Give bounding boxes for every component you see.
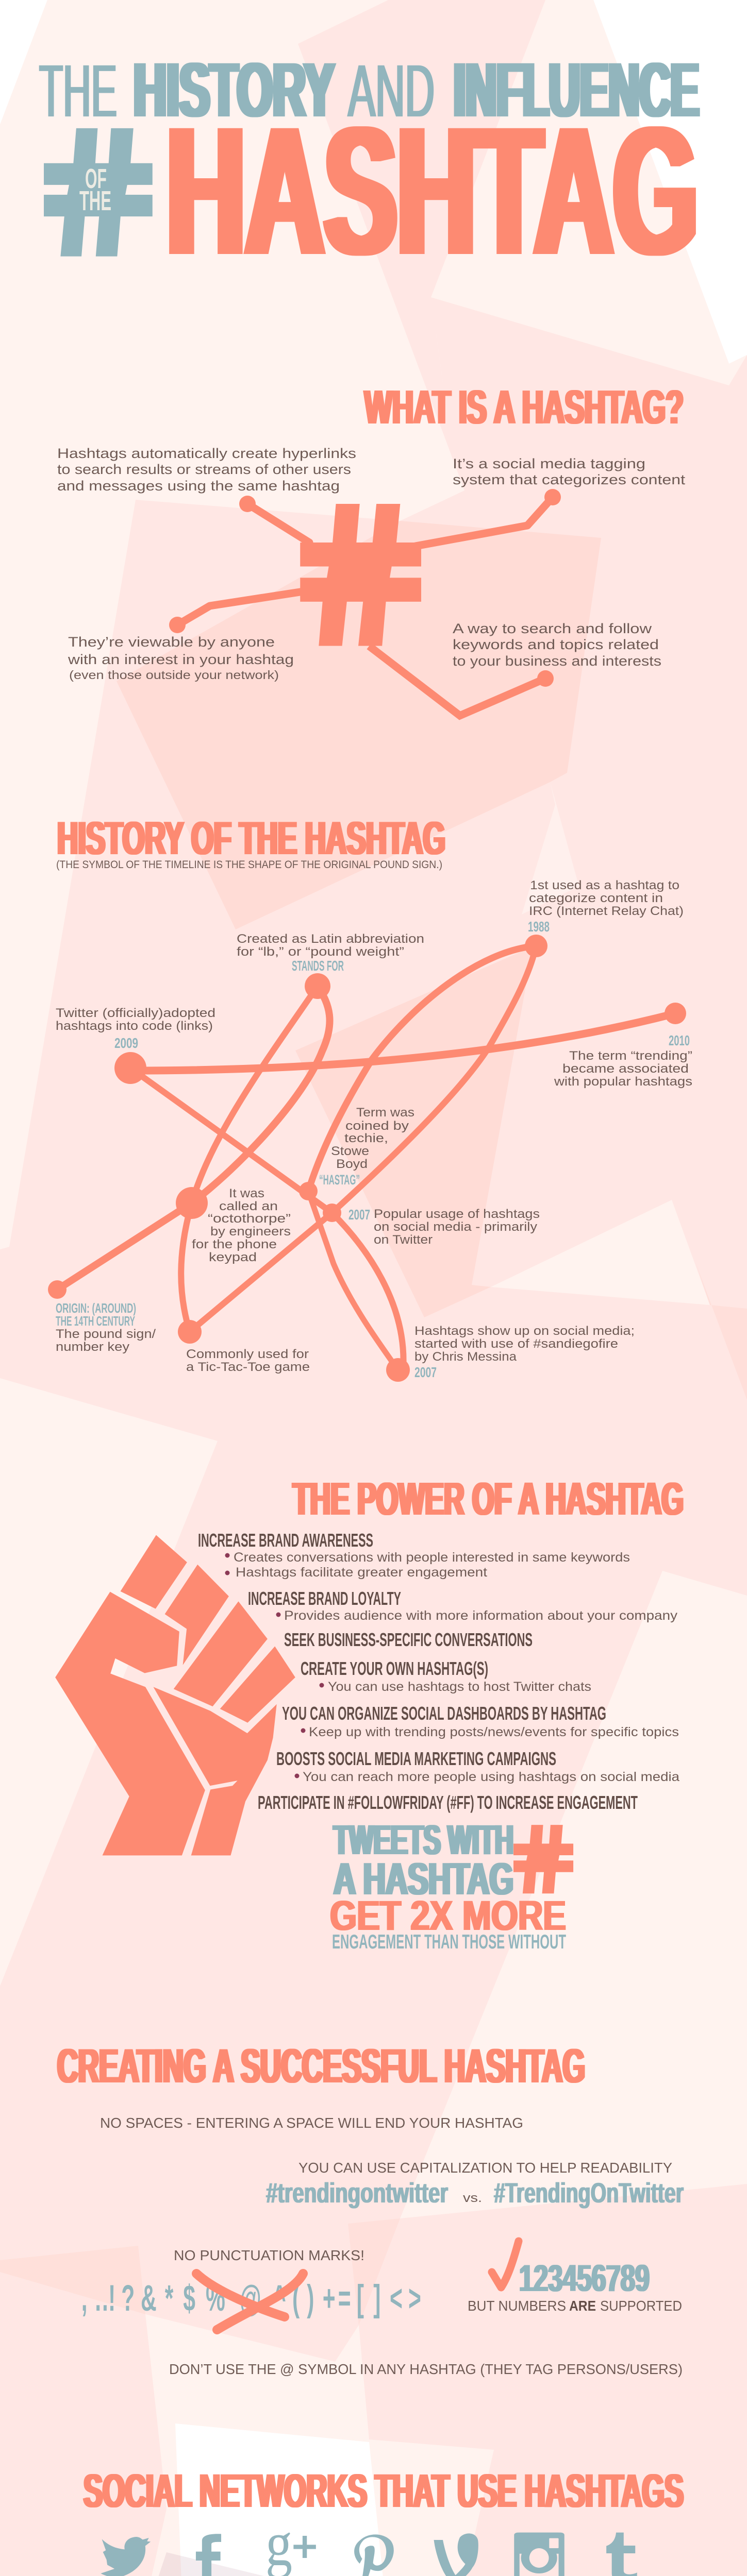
timeline event: term coined: “HASTAG” bbox=[319, 1172, 360, 1188]
text block: search and follow: A way to search and follow bbox=[453, 621, 652, 636]
icon: hash with connector legs bbox=[169, 489, 561, 716]
tip: no punctuation: NO PUNCTUATION MARKS! bbox=[174, 2247, 364, 2263]
benefit: campaigns: BOOSTS SOCIAL MEDIA MARKETING CAMPAIGNS bbox=[276, 1748, 556, 1769]
benefit: conversations: SEEK BUSINESS-SPECIFIC CONVERSATIONS bbox=[284, 1629, 533, 1650]
tip: numbers supported: BUT NUMBERS bbox=[468, 2298, 566, 2314]
tip: numbers supported bbox=[468, 2241, 682, 2314]
timeline event: origin: THE 14TH CENTURY bbox=[56, 1313, 135, 1329]
text block: search and follow: keywords and topics related bbox=[453, 637, 659, 652]
panel: the power of a hashtag bbox=[55, 1473, 684, 1953]
timeline event: trending 2010: The term “trending” bbox=[569, 1049, 692, 1063]
timeline event: IRC 1988 bbox=[528, 878, 684, 935]
benefit: brand awareness bbox=[198, 1530, 630, 1580]
text block: viewable by anyone: with an interest in your hashtag bbox=[68, 652, 294, 667]
timeline event: octothorpe: keypad bbox=[209, 1250, 257, 1264]
timeline event: chris messina 2007: started with use of #sandiegofire bbox=[414, 1337, 618, 1351]
timeline event: twitter 2009: Twitter (officially)adopted bbox=[56, 1006, 215, 1020]
timeline event: stands for: STANDS FOR bbox=[292, 958, 344, 974]
timeline event: trending 2010: became associated bbox=[562, 1062, 689, 1076]
timeline event: octothorpe: called an bbox=[219, 1199, 278, 1213]
timeline event: term coined: techie, bbox=[344, 1131, 388, 1145]
tip: no spaces: NO SPACES - ENTERING A SPACE WILL END YOUR HASHTAG bbox=[100, 2115, 523, 2131]
timeline event: origin: ORIGIN: (AROUND) bbox=[56, 1300, 136, 1316]
timeline event: tic-tac-toe: Commonly used for bbox=[186, 1347, 309, 1361]
list: benefits bbox=[198, 1530, 679, 1813]
timeline event: octothorpe: for the phone bbox=[192, 1238, 277, 1251]
text block: tagging system bbox=[453, 456, 686, 487]
timeline event: term coined: Term was bbox=[356, 1106, 414, 1120]
icon: coral hash bbox=[513, 1825, 573, 1893]
icon: large hash with of the: THE bbox=[79, 185, 111, 216]
timeline event: origin bbox=[56, 1300, 156, 1354]
benefit: campaigns bbox=[276, 1748, 679, 1784]
benefit: brand loyalty: INCREASE BRAND LOYALTY bbox=[248, 1588, 401, 1609]
timeline event: octothorpe: by engineers bbox=[210, 1225, 291, 1239]
benefit: own hashtags: You can use hashtags to host Twitter chats bbox=[328, 1680, 591, 1694]
timeline event: IRC 1988: IRC (Internet Relay Chat) bbox=[529, 904, 684, 918]
timeline event: term coined: coined by bbox=[345, 1119, 409, 1133]
timeline event: octothorpe bbox=[192, 1187, 291, 1264]
benefit: brand awareness: Hashtags facilitate greater engagement bbox=[236, 1565, 487, 1580]
tip: no punctuation bbox=[81, 2247, 421, 2330]
text block: search and follow bbox=[453, 621, 661, 669]
title line: the history and influence: THE bbox=[39, 49, 117, 132]
timeline event: stands for bbox=[237, 932, 424, 974]
timeline: pound sign shape bbox=[48, 935, 686, 1382]
timeline event: term coined: Stowe bbox=[331, 1144, 369, 1158]
timeline event: trending 2010: 2010 bbox=[669, 1032, 690, 1048]
text block: hyperlinks: to search results or streams of other users bbox=[57, 462, 351, 477]
benefit: brand awareness: Creates conversations with people interested in same keywords bbox=[234, 1550, 630, 1565]
panel: creating a successful hashtag bbox=[57, 2039, 684, 2377]
icon: check mark bbox=[492, 2241, 519, 2287]
text block: viewable by anyone: They’re viewable by anyone bbox=[68, 634, 275, 650]
heading: HISTORY OF THE HASHTAG bbox=[57, 812, 445, 865]
title bbox=[39, 46, 699, 293]
timeline event: chris messina 2007: by Chris Messina bbox=[414, 1350, 517, 1364]
text block: viewable by anyone: (even those outside your network) bbox=[69, 668, 279, 682]
benefit: brand awareness: INCREASE BRAND AWARENESS bbox=[198, 1530, 373, 1551]
benefit: campaigns: You can reach more people using hashtags on social media bbox=[303, 1770, 679, 1784]
timeline event: chris messina 2007: Hashtags show up on social media; bbox=[414, 1324, 635, 1338]
benefit: dashboards: Keep up with trending posts/news/events for specific topics bbox=[309, 1725, 679, 1739]
subtitle: (THE SYMBOL OF THE TIMELINE IS THE SHAPE OF THE ORIGINAL POUND SIGN.) bbox=[56, 859, 442, 871]
callout: tweets with a hashtag bbox=[330, 1817, 573, 1953]
icon: red cross bbox=[196, 2274, 303, 2330]
timeline event: twitter 2009 bbox=[56, 1006, 215, 1051]
timeline event: popular usage 2007 bbox=[348, 1207, 540, 1247]
callout: tweets with a hashtag: GET 2X MORE bbox=[330, 1892, 566, 1939]
text block: viewable by anyone bbox=[68, 634, 294, 682]
timeline event: popular usage 2007: on social media - primarily bbox=[374, 1220, 537, 1234]
timeline event: IRC 1988: 1988 bbox=[528, 919, 550, 935]
benefit: own hashtags bbox=[301, 1658, 591, 1694]
timeline event: IRC 1988: 1st used as a hashtag to bbox=[530, 878, 679, 892]
icon: raised fist bbox=[55, 1535, 295, 1855]
icon: large hash with of the: OF bbox=[85, 163, 107, 194]
panel: social networks bbox=[84, 2465, 684, 2576]
panel: history of the hashtag bbox=[48, 812, 692, 1382]
timeline event: twitter 2009: hashtags into code (links) bbox=[56, 1019, 213, 1033]
timeline nodes bbox=[48, 935, 686, 1382]
tip: numbers supported: 123456789 bbox=[519, 2258, 650, 2299]
benefit: brand loyalty bbox=[248, 1588, 678, 1623]
icons: social networks bbox=[101, 2509, 637, 2576]
timeline event: tic-tac-toe: a Tic-Tac-Toe game bbox=[186, 1360, 310, 1374]
timeline event: popular usage 2007: 2007 bbox=[348, 1207, 370, 1223]
tip: numbers supported: SUPPORTED bbox=[600, 2298, 682, 2314]
title line: the history and influence: HISTORY bbox=[134, 46, 335, 133]
tip: no punctuation: ,..!?&*$%@^()+=[]<> bbox=[81, 2278, 421, 2319]
text block: search and follow: to your business and interests bbox=[453, 653, 661, 669]
icon: instagram bbox=[514, 2533, 565, 2576]
timeline event: octothorpe: “octothorpe” bbox=[208, 1212, 291, 1226]
timeline event: term coined: Boyd bbox=[336, 1157, 368, 1171]
tip: capitalization: YOU CAN USE CAPITALIZATION TO HELP READABILITY bbox=[298, 2160, 672, 2176]
benefit: brand loyalty: Provides audience with more information about your company bbox=[284, 1608, 678, 1623]
benefit: dashboards bbox=[282, 1703, 679, 1739]
timeline event: stands for: for “lb,” or “pound weight” bbox=[237, 945, 404, 959]
tip: capitalization bbox=[266, 2160, 684, 2209]
timeline event: trending 2010 bbox=[554, 1032, 692, 1089]
text block: tagging system: system that categorizes content bbox=[453, 472, 686, 487]
title line: the history and influence: AND bbox=[348, 49, 435, 132]
benefit: own hashtags: CREATE YOUR OWN HASHTAG(S) bbox=[301, 1658, 488, 1679]
text block: hyperlinks bbox=[57, 446, 356, 494]
timeline event: twitter 2009: 2009 bbox=[114, 1035, 138, 1051]
title line: the history and influence bbox=[39, 46, 699, 133]
icon: facebook bbox=[196, 2534, 221, 2576]
icon: twitter bbox=[101, 2537, 151, 2576]
timeline event: popular usage 2007: Popular usage of hashtags bbox=[374, 1207, 540, 1221]
callout: tweets with a hashtag: A HASHTAG bbox=[334, 1853, 513, 1904]
tip: capitalization: #trendingontwitter bbox=[266, 2177, 448, 2209]
timeline event: chris messina 2007 bbox=[414, 1324, 635, 1380]
timeline event: origin: The pound sign/ bbox=[56, 1327, 156, 1341]
icon: pinterest bbox=[354, 2534, 394, 2576]
timeline event: IRC 1988: categorize content in bbox=[529, 891, 663, 905]
tip: capitalization: vs. bbox=[463, 2191, 482, 2205]
timeline event: term coined bbox=[319, 1106, 414, 1188]
icon: large hash with of the bbox=[44, 128, 153, 257]
icon: tumblr bbox=[606, 2533, 637, 2576]
text block: hyperlinks: Hashtags automatically create hyperlinks bbox=[57, 446, 356, 461]
timeline event: origin: number key bbox=[56, 1340, 129, 1354]
timeline event: octothorpe: It was bbox=[229, 1187, 264, 1200]
tip: numbers supported: ARE bbox=[569, 2298, 596, 2314]
text block: hyperlinks: and messages using the same hashtag bbox=[57, 478, 340, 494]
panel: what is a hashtag bbox=[57, 380, 686, 716]
tip: no at symbol: DON’T USE THE @ SYMBOL IN ANY HASHTAG (THEY TAG PERSONS/USERS) bbox=[169, 2361, 683, 2377]
callout: tweets with a hashtag: ENGAGEMENT THAN THOSE WITHOUT bbox=[332, 1931, 566, 1953]
timeline event: tic-tac-toe bbox=[186, 1347, 310, 1374]
text block: tagging system: It’s a social media tagging bbox=[453, 456, 645, 471]
icon: plus of google plus bbox=[293, 2536, 316, 2558]
timeline event: trending 2010: with popular hashtags bbox=[554, 1075, 692, 1089]
timeline event: chris messina 2007: 2007 bbox=[414, 1364, 437, 1380]
timeline event: stands for: Created as Latin abbreviation bbox=[237, 932, 424, 946]
icon: vine bbox=[434, 2533, 478, 2576]
timeline event: popular usage 2007: on Twitter bbox=[374, 1233, 433, 1247]
callout: tweets with a hashtag: TWEETS WITH bbox=[334, 1817, 513, 1863]
